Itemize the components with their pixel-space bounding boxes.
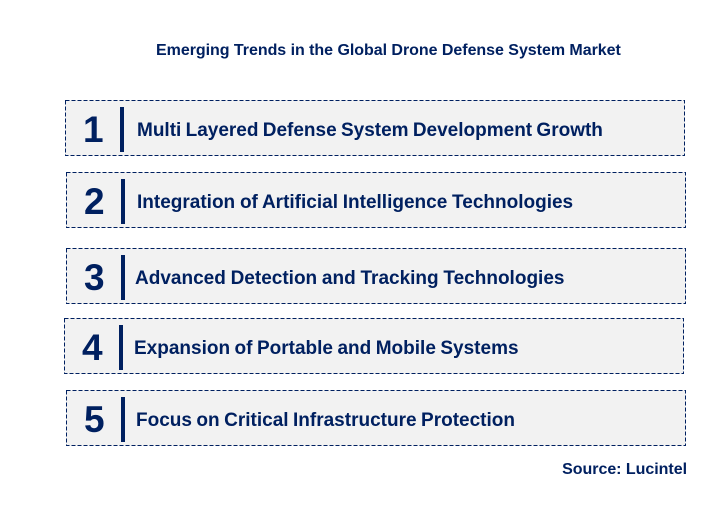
trend 2 text: Integration of Artificial Intelligence Technologies [137,192,573,213]
panel: trend 2 [66,172,686,228]
trend 1 text: Multi Layered Defense System Development Growth [137,120,603,141]
number 4: 4 [82,327,103,368]
divider bar 1 [120,107,124,152]
panel: trend 1 [65,100,685,156]
panel: trend 3 [66,248,686,304]
panel: trend 4 [64,318,684,374]
divider bar 5 [121,397,125,442]
number 1: 1 [83,109,104,150]
divider bar 4 [119,325,123,370]
divider bar 3 [121,255,125,300]
trend 4 text: Expansion of Portable and Mobile Systems [134,338,519,359]
trend 5 text: Focus on Critical Infrastructure Protection [136,410,515,431]
number 3: 3 [84,257,105,298]
source note: Source: Lucintel [562,461,687,478]
panel: trend 5 [66,390,686,446]
divider bar 2 [121,179,125,224]
number 5: 5 [84,399,105,440]
trend 3 text: Advanced Detection and Tracking Technologies [135,268,564,289]
title: Emerging Trends in the Global Drone Defense System Market [156,42,621,59]
number 2: 2 [84,181,105,222]
